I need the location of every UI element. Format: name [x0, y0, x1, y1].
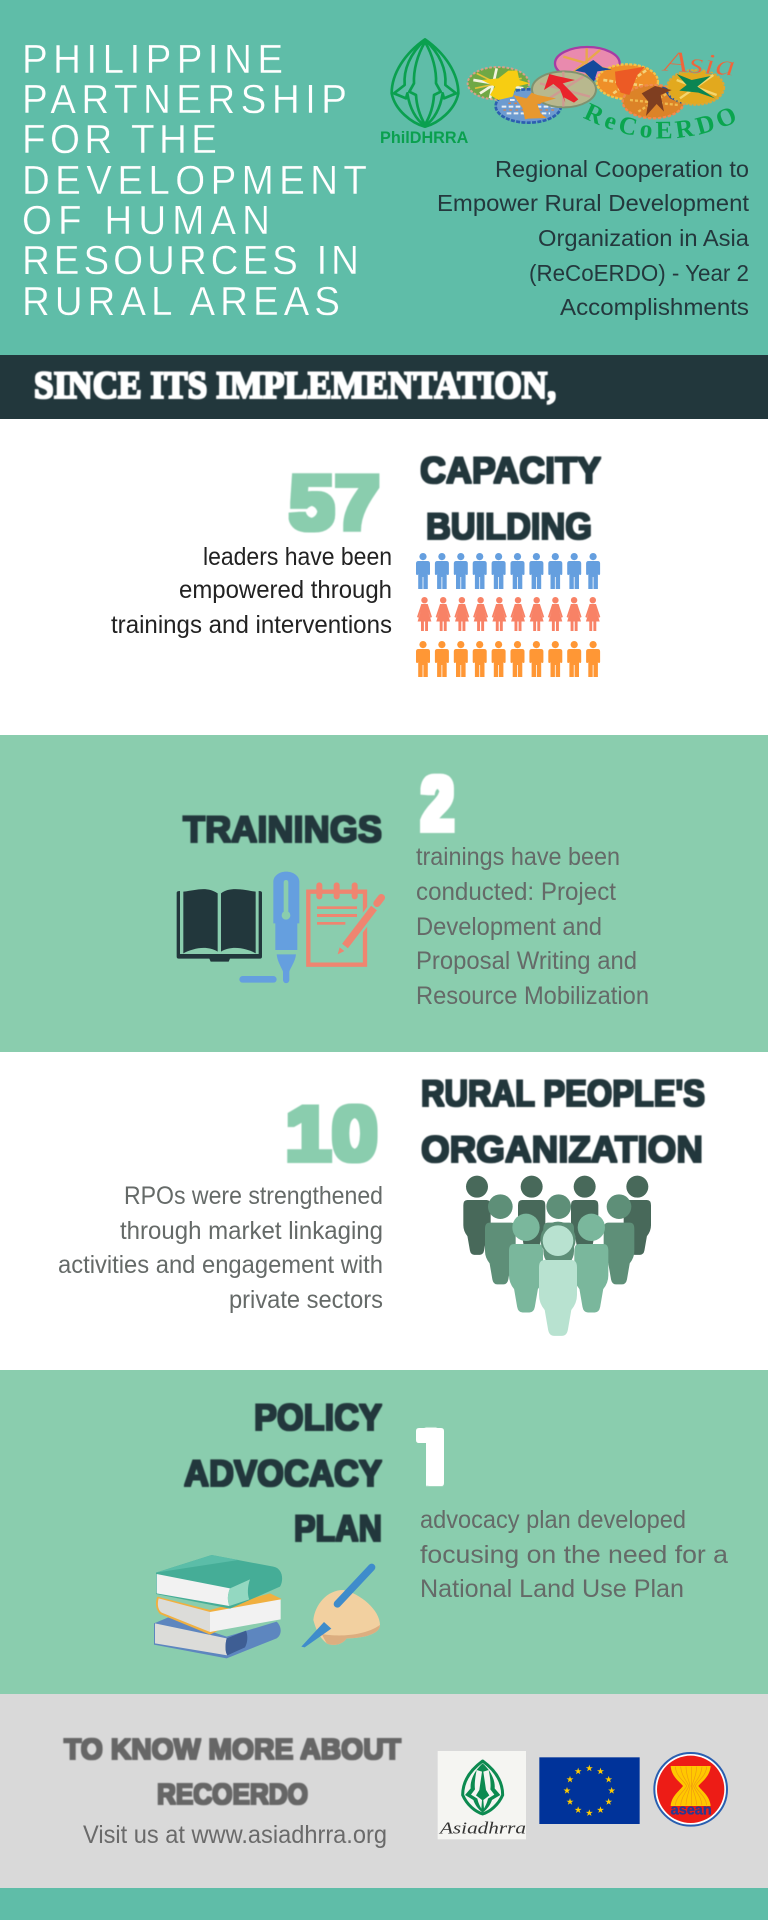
text: leaders: empowered through — [179, 576, 392, 604]
logo: ASEAN: asean — [671, 1803, 712, 1819]
icon: notepad and pencil — [308, 882, 381, 965]
title: PHILIPPINE — [22, 37, 283, 82]
text: subtitle — [437, 156, 750, 320]
icon: hand writing — [301, 1567, 380, 1647]
icon: fountain pen — [239, 872, 299, 983]
green and yellow gear — [468, 67, 529, 100]
icon: open book — [177, 889, 262, 962]
title: OF HUMAN — [22, 198, 270, 243]
text: subtitle: Organization in Asia — [538, 225, 749, 251]
icon: PhilDHRRA logo — [380, 39, 468, 147]
heading: capacity building: BUILDING — [426, 506, 592, 547]
heading: rural people's organization — [421, 1073, 705, 1170]
text: trainings description: Resource Mobilization — [416, 982, 649, 1010]
pink gear — [555, 47, 620, 80]
heading: capacity building — [420, 450, 601, 547]
text: RPOs description — [58, 1182, 383, 1314]
heading: to know more: RECOERDO — [157, 1779, 308, 1811]
orange gear — [597, 64, 658, 99]
heading: rural people's organization: RURAL PEOPLE'S — [421, 1073, 705, 1114]
logo: ASEAN — [654, 1753, 727, 1826]
title: DEVELOPMENT — [22, 158, 367, 203]
heading: rural people's organization: ORGANIZATION — [421, 1129, 703, 1170]
tan gear — [532, 71, 596, 107]
icon row: blue men — [416, 553, 600, 589]
icon: group of people — [463, 1176, 651, 1336]
text: leaders: trainings and interventions — [111, 611, 392, 639]
text: trainings description: conducted: Project — [416, 878, 616, 906]
title: PARTNERSHIP — [22, 77, 347, 122]
number: 1 — [410, 1415, 453, 1500]
panel: capacity building — [0, 419, 768, 735]
heading: policy advocacy plan: POLICY — [254, 1397, 382, 1438]
logo: EU flag — [539, 1757, 640, 1824]
yellow gear — [667, 70, 724, 105]
text: Asia: Asia — [660, 46, 737, 83]
text: RPOs description: activities and engagement with — [58, 1251, 383, 1279]
figures — [482, 60, 715, 119]
text: leaders: leaders have been — [203, 543, 392, 571]
text: advocacy description: National Land Use Plan — [420, 1575, 684, 1603]
text: ReCoERDO: ReCoERDO — [583, 102, 735, 138]
text: advocacy description: advocacy plan developed — [420, 1506, 686, 1534]
logo: Asiadhrra — [438, 1751, 526, 1839]
brown gear — [623, 85, 684, 118]
panel: trainings — [0, 735, 768, 1052]
text: subtitle: Accomplishments — [560, 294, 749, 320]
text: RPOs description: through market linkaging — [120, 1217, 383, 1245]
text: trainings description: Proposal Writing and — [416, 947, 637, 975]
text: subtitle: Empower Rural Development — [437, 190, 750, 216]
text: leaders — [111, 543, 392, 639]
text: advocacy description: focusing on the need for a — [420, 1541, 728, 1569]
heading: capacity building: CAPACITY — [420, 450, 601, 491]
number: 57: 57 — [289, 461, 380, 546]
panel: footer — [0, 1694, 768, 1888]
icon: ReCoERDO Asia logo — [466, 46, 737, 138]
text: visit us: Visit us at www.asiadhrra.org — [83, 1821, 387, 1849]
icon row: orange men — [416, 641, 600, 677]
panel: policy advocacy plan — [0, 1370, 768, 1694]
title — [22, 37, 367, 324]
text: trainings description: Development and — [416, 913, 602, 941]
heading: trainings: TRAININGS — [183, 809, 382, 850]
text: subtitle: Regional Cooperation to — [495, 156, 749, 182]
number: 10: 10 — [285, 1092, 378, 1177]
heading: policy advocacy plan: ADVOCACY — [184, 1453, 382, 1494]
banner: since its implementation — [0, 355, 768, 419]
panel: header — [0, 0, 768, 355]
blue gear — [496, 89, 561, 123]
number: 1: 1 — [419, 1415, 441, 1500]
icon: PhilDHRRA logo: PhilDHRRA — [380, 128, 468, 147]
icon: stack of books — [154, 1555, 282, 1658]
icon row: red women — [417, 597, 600, 631]
title: RESOURCES IN — [22, 238, 359, 283]
heading: to know more: TO KNOW MORE ABOUT — [64, 1734, 401, 1766]
text: trainings description — [416, 843, 649, 1010]
number: 2: 2 — [421, 762, 454, 847]
text: subtitle: (ReCoERDO) - Year 2 — [529, 260, 749, 286]
title: FOR THE — [22, 117, 217, 162]
text: advocacy description — [420, 1506, 728, 1603]
heading: policy advocacy plan — [184, 1397, 382, 1549]
bottom band — [0, 1888, 768, 1920]
heading: to know more — [64, 1734, 401, 1811]
logo: Asiadhrra: Asiadhrra — [439, 1818, 526, 1837]
title: RURAL AREAS — [22, 279, 340, 324]
panel: rural people's organization — [0, 1052, 768, 1370]
text: trainings description: trainings have been — [416, 843, 620, 871]
text: RPOs description: private sectors — [229, 1286, 383, 1314]
text: RPOs description: RPOs were strengthened — [124, 1182, 383, 1210]
banner: since its implementation: SINCE ITS IMPLEMENTATION, — [34, 364, 556, 407]
heading: policy advocacy plan: PLAN — [294, 1508, 382, 1549]
